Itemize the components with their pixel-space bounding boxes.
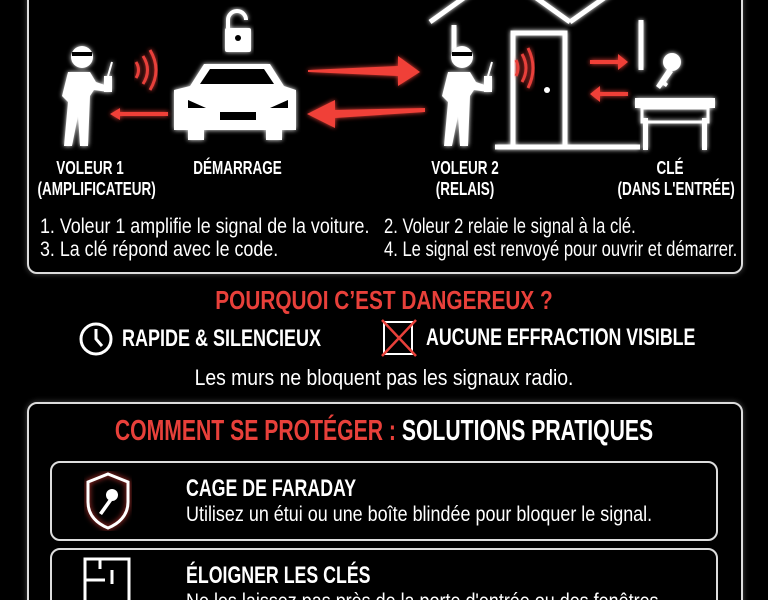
icon: shield key: [84, 471, 132, 531]
note text: Les murs ne bloquent pas les signaux radio.: [195, 365, 573, 390]
card: keys away: ÉLOIGNER LES CLÉS: [186, 562, 371, 589]
item: fast & silent: RAPIDE & SILENCIEUX: [122, 325, 321, 352]
icon: key and table: [635, 53, 715, 150]
text: 4. Le signal est renvoyé pour ouvrir et démarrer.: [384, 238, 737, 261]
item: no visible break-in: AUCUNE EFFRACTION VISIBLE: [426, 324, 695, 351]
icon: thief 2: [442, 46, 492, 146]
heading: why dangerous: POURQUOI C’EST DANGEREUX ?: [215, 285, 553, 315]
text: (DANS L'ENTRÉE): [618, 179, 735, 199]
steps text: 1. Voleur 1 amplifie le signal de la voiture.: [40, 215, 369, 238]
panel: protection: [27, 402, 743, 600]
item: no visible break-in: [381, 319, 695, 357]
card: faraday: Utilisez un étui ou une boîte blindée pour bloquer le signal.: [186, 503, 652, 526]
icon: thief 1: [62, 46, 112, 146]
card: faraday: CAGE DE FARADAY: [186, 475, 356, 502]
text: VOLEUR 2: [431, 158, 499, 178]
labels: VOLEUR 1: [56, 158, 124, 178]
icon: signal waves 1: [136, 50, 156, 90]
panel: how relay attack works: [27, 0, 743, 274]
icon: floor plan: [84, 558, 130, 600]
text: CLÉ: [656, 158, 684, 178]
labels: (AMPLIFICATEUR): [38, 179, 156, 199]
diagram: [58, 0, 719, 154]
steps text: [40, 215, 369, 261]
text: DÉMARRAGE: [193, 158, 282, 178]
icon: car: [174, 64, 296, 140]
labels: [38, 158, 156, 199]
item: fast & silent: [80, 322, 321, 356]
icon: house: [430, 0, 641, 147]
card: faraday: [50, 461, 718, 541]
text: 2. Voleur 2 relaie le signal à la clé.: [384, 215, 636, 238]
icon: padlock: [225, 11, 251, 52]
card: keys away: [50, 548, 718, 600]
arrows: [110, 54, 628, 128]
steps text: 3. La clé répond avec le code.: [40, 238, 278, 261]
heading: protection: COMMENT SE PROTÉGER : SOLUTIONS PRATIQUES: [115, 415, 653, 447]
text: (RELAIS): [436, 179, 494, 199]
